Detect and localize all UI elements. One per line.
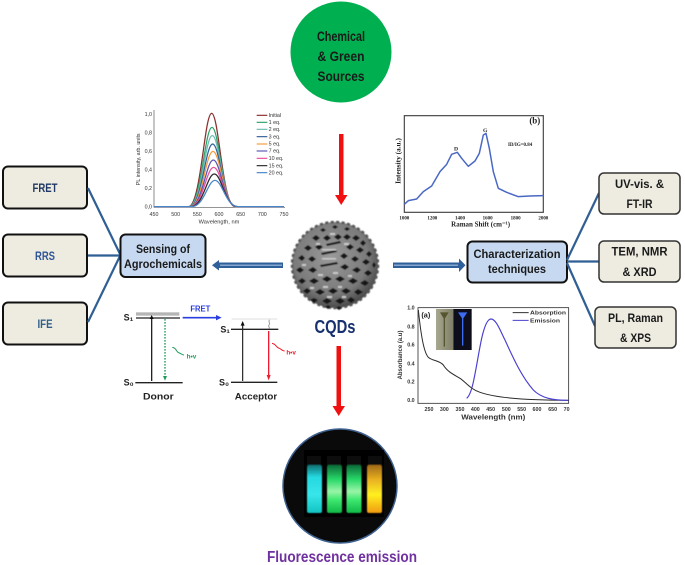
absorption and emission chart: 0.2 [407,380,415,386]
PL intensity line chart: 750 [280,212,288,218]
connectors: techniques to sensing [88,188,120,322]
Raman spectrum chart: 1000 [399,216,410,221]
Raman spectrum chart: (b) [529,116,540,126]
absorption and emission chart: 0.8 [407,324,415,330]
absorption and emission chart: 450 [486,407,495,413]
right method box: TEM, NMR & XRD: & XRD [622,265,657,279]
hub box: Characterization techniques: techniques [488,262,546,276]
Raman spectrum chart [394,116,549,228]
Raman spectrum chart: 1200 [427,216,438,221]
right method box: PL, Raman & XPS [595,307,676,348]
absorption and emission chart: 550 [517,407,526,413]
FRET energy diagram: h•v [187,353,197,360]
source circle: Chemical & Green Sources: Sources [318,69,364,84]
left technique box: FRET [3,166,87,208]
absorption and emission chart: 70 [564,407,570,413]
PL intensity line chart: PL intensity, arb. units [136,133,142,185]
PL intensity line chart: 0,2 [145,186,152,192]
hub box: Sensing of Agrochemicals [120,234,206,277]
PL intensity line chart: 0,4 [145,167,152,173]
Raman spectrum chart: Raman Shift (cm⁻¹) [451,220,511,228]
arrow: CQDs to characterization [393,258,466,272]
absorption and emission chart: 250 [425,407,433,413]
left technique box: RRS [3,234,87,276]
PL intensity line chart: 7 eq. [269,149,281,155]
absorption and emission chart: 0.6 [407,343,415,349]
PL intensity line chart: 700 [258,212,267,218]
Raman spectrum chart: 1600 [483,216,493,221]
PL intensity line chart: 20 eq. [269,170,283,176]
absorption and emission chart: Absorption [530,311,567,317]
label: CQDs: CQDs [314,316,356,337]
FRET energy diagram: S₁ [124,312,134,322]
FRET energy diagram: S₀ [219,378,229,388]
absorption and emission chart: 650 [548,407,557,413]
hub box: Sensing of Agrochemicals: Agrochemicals [124,257,202,271]
right method box: PL, Raman & XPS: & XPS [620,331,651,345]
Raman spectrum chart: G [483,128,488,134]
FRET energy diagram: Acceptor [235,392,278,402]
right method box: UV-vis & FT-IR: UV-vis. & [615,177,664,191]
Raman spectrum chart: Intensity (a.u.) [394,138,403,184]
PL intensity line chart: 0,8 [145,130,152,136]
absorption and emission chart: Emission [530,318,561,324]
left technique box: RRS: RRS [35,249,55,263]
PL intensity line chart: 15 eq. [269,163,283,169]
left technique box: FRET: FRET [32,181,58,195]
PL intensity line chart: 550 [193,212,202,218]
hub box: Characterization techniques: Characterization [474,247,560,261]
FRET energy diagram: S₀ [124,378,134,388]
hub box: Characterization techniques [468,242,567,282]
Raman spectrum chart: 1400 [455,216,465,221]
right method box: UV-vis & FT-IR [599,173,680,214]
PL intensity line chart: 450 [150,212,158,218]
right method box: TEM, NMR & XRD [599,241,680,282]
FRET energy diagram [124,305,296,402]
FRET energy diagram: S₁ [220,324,230,334]
Raman spectrum chart: 2000 [538,216,549,221]
source circle: Chemical & Green Sources: Chemical [317,29,365,44]
PL intensity line chart: 500 [171,212,180,218]
PL intensity line chart: 0,0 [145,205,152,211]
right method box: TEM, NMR & XRD: TEM, NMR [612,244,668,258]
absorption and emission chart: Wavelength (nm) [461,415,525,422]
absorption and emission chart [398,306,570,422]
arrow: CQDs to sensing [212,260,283,270]
absorption and emission chart: 300 [440,407,449,413]
PL intensity line chart: Initial [269,113,281,119]
PL intensity line chart: 2 eq. [269,127,281,133]
left technique box: IFE: IFE [38,317,52,331]
absorption and emission chart: 600 [533,407,541,413]
absorption and emission chart: Absorbance (a.u) [398,331,404,379]
absorption and emission chart: (a) [421,310,431,319]
Raman spectrum chart: ID/IG=0.84 [508,143,533,148]
absorption and emission chart: 400 [471,407,480,413]
right method box: UV-vis & FT-IR: FT-IR [626,197,653,211]
FRET energy diagram: Donor [143,392,174,402]
PL intensity line chart: 650 [236,212,245,218]
PL intensity line chart: 1 eq. [269,120,281,126]
connectors: characterization to methods [567,193,599,326]
fluorescent vials photo [283,429,397,543]
absorption and emission chart: 0.4 [407,361,415,367]
left technique box: IFE [3,302,87,344]
PL intensity line chart: 1,0 [145,112,152,118]
PL intensity line chart: 10 eq. [269,156,283,162]
PL intensity line chart: 0,6 [145,149,152,155]
Raman spectrum chart: 1800 [511,216,521,221]
source circle: Chemical & Green Sources: & Green [318,49,364,64]
absorption and emission chart: 1.0 [407,306,415,312]
PL intensity line chart: 600 [215,212,223,218]
right method box: PL, Raman & XPS: PL, Raman [608,311,663,325]
hub box: Sensing of Agrochemicals: Sensing of [136,242,191,256]
PL intensity line chart [136,110,288,225]
PL intensity line chart: Wavelength, nm [199,219,240,225]
CQD nanoparticle sphere [292,222,378,310]
arrow: sources to CQDs [335,134,348,205]
Raman spectrum chart: D [454,146,458,152]
FRET energy diagram: h•v [286,349,296,356]
absorption and emission chart: 500 [502,407,511,413]
source circle: Chemical & Green Sources [290,2,392,102]
absorption and emission chart: 350 [456,407,464,413]
FRET energy diagram: FRET [190,305,210,314]
PL intensity line chart: 5 eq. [269,142,281,148]
absorption and emission chart: 0.0 [407,398,415,404]
PL intensity line chart: 3 eq. [269,134,281,140]
arrow: CQDs to fluorescence [332,346,345,416]
